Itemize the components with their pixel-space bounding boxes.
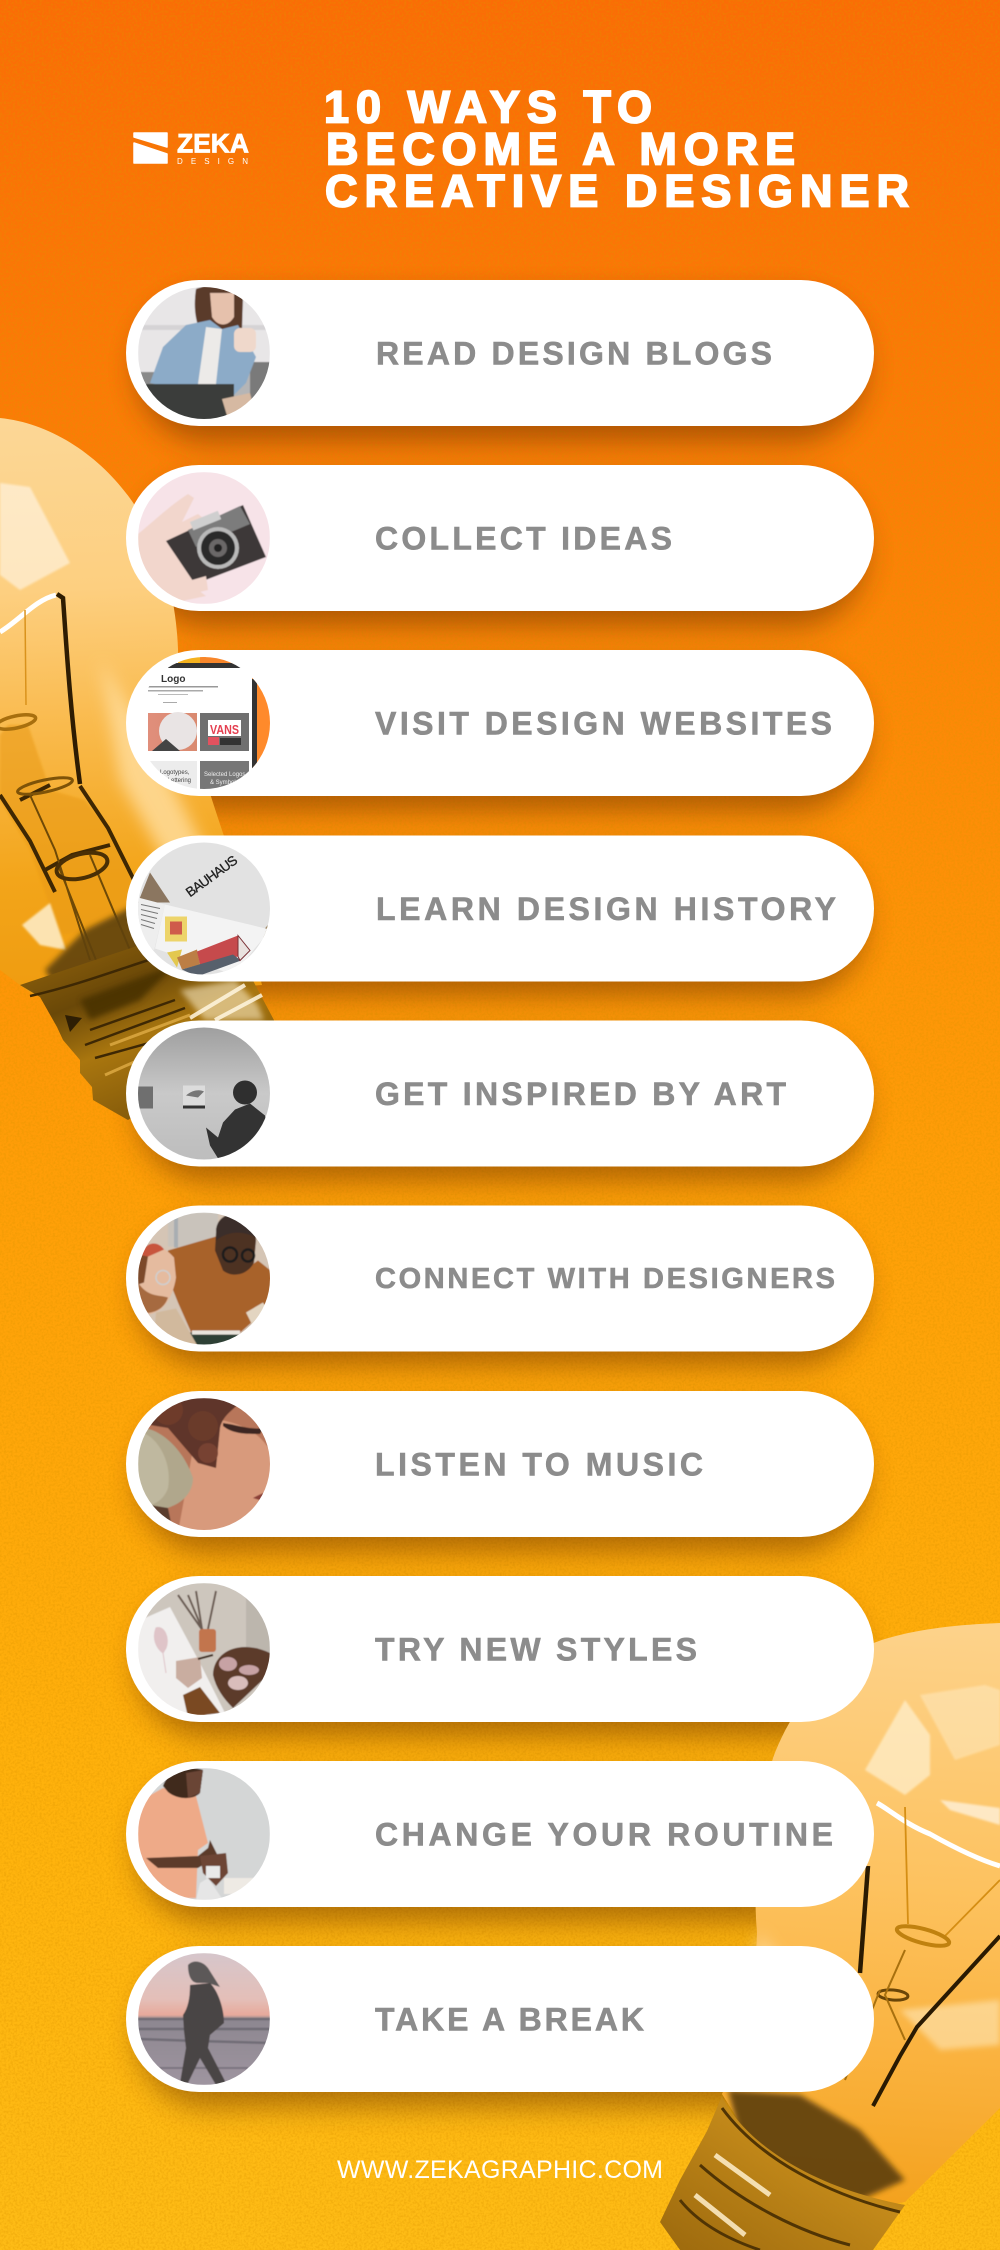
- item 3: visit design websites: [126, 650, 874, 796]
- photo: woman walking on beach: [138, 1953, 270, 2085]
- logo wordmark: ZEKA: [177, 128, 249, 158]
- label: TRY NEW STYLES: [375, 1632, 697, 1668]
- logo: [134, 128, 249, 166]
- title: BECOME A MORE: [326, 124, 795, 174]
- item 6: connect with designers: [126, 1206, 874, 1352]
- photo: woman with headphones: [138, 1395, 273, 1532]
- title: CREATIVE DESIGNER: [325, 166, 909, 216]
- right bulb sediment: [728, 2090, 905, 2200]
- photo: design website screenshot: Logotypes,: [160, 770, 190, 776]
- bulb sediment: [45, 905, 190, 995]
- item 2: collect ideas: [126, 465, 874, 611]
- photo: man in pink t-shirt: [138, 1768, 270, 1900]
- photo: bauhaus book: [138, 842, 270, 976]
- item 5: get inspired by art: [126, 1020, 874, 1166]
- logo mark: [134, 133, 167, 163]
- item 7: listen to music: [126, 1391, 874, 1537]
- left light bulb illustration: [0, 418, 275, 1120]
- label: LISTEN TO MUSIC: [375, 1446, 703, 1482]
- item 1: read design blogs: [126, 280, 874, 426]
- item 10: take a break: [126, 1946, 874, 2092]
- photo: painter with palette: [138, 1583, 270, 1717]
- label: GET INSPIRED BY ART: [375, 1076, 786, 1112]
- photo: design website screenshot: Logo: [161, 674, 185, 685]
- bulb screw base: [20, 945, 275, 1120]
- photo: design website screenshot: VANS: [210, 722, 239, 737]
- photo: design website screenshot: & Lettering: [162, 778, 191, 784]
- item 4: learn design history: [126, 836, 874, 982]
- photo: design website screenshot: & Symbols: [210, 780, 239, 786]
- photo: two designers talking: [138, 1212, 273, 1346]
- item 9: change your routine: [126, 1761, 874, 1907]
- label: CHANGE YOUR ROUTINE: [375, 1816, 833, 1852]
- photo: design website screenshot: Selected Logos: [204, 772, 245, 778]
- label: LEARN DESIGN HISTORY: [376, 891, 836, 927]
- item 8: try new styles: [126, 1576, 874, 1722]
- footer website url: WWW.ZEKAGRAPHIC.COM: [337, 2156, 663, 2184]
- right bulb screw base: [660, 2096, 905, 2250]
- photo: design website screenshot: [138, 657, 270, 789]
- pill drop shadows: [136, 296, 866, 2108]
- title: 10 WAYS TO: [324, 82, 652, 132]
- title: [324, 82, 909, 216]
- label: VISIT DESIGN WEBSITES: [375, 706, 832, 742]
- label: CONNECT WITH DESIGNERS: [375, 1263, 835, 1295]
- label: READ DESIGN BLOGS: [376, 336, 772, 372]
- photo: woman with laptop and mug: [138, 286, 270, 420]
- photo: bauhaus book: BAUHAUS: [183, 853, 240, 900]
- right light bulb illustration: [660, 1623, 1000, 2250]
- logo subtitle: DESIGN: [177, 157, 248, 166]
- photo: gallery visitor silhouette: [138, 1028, 273, 1162]
- photo: hand holding camera: [138, 472, 270, 604]
- bulb stem: [0, 725, 135, 935]
- label: TAKE A BREAK: [375, 2002, 644, 2038]
- label: COLLECT IDEAS: [375, 520, 672, 556]
